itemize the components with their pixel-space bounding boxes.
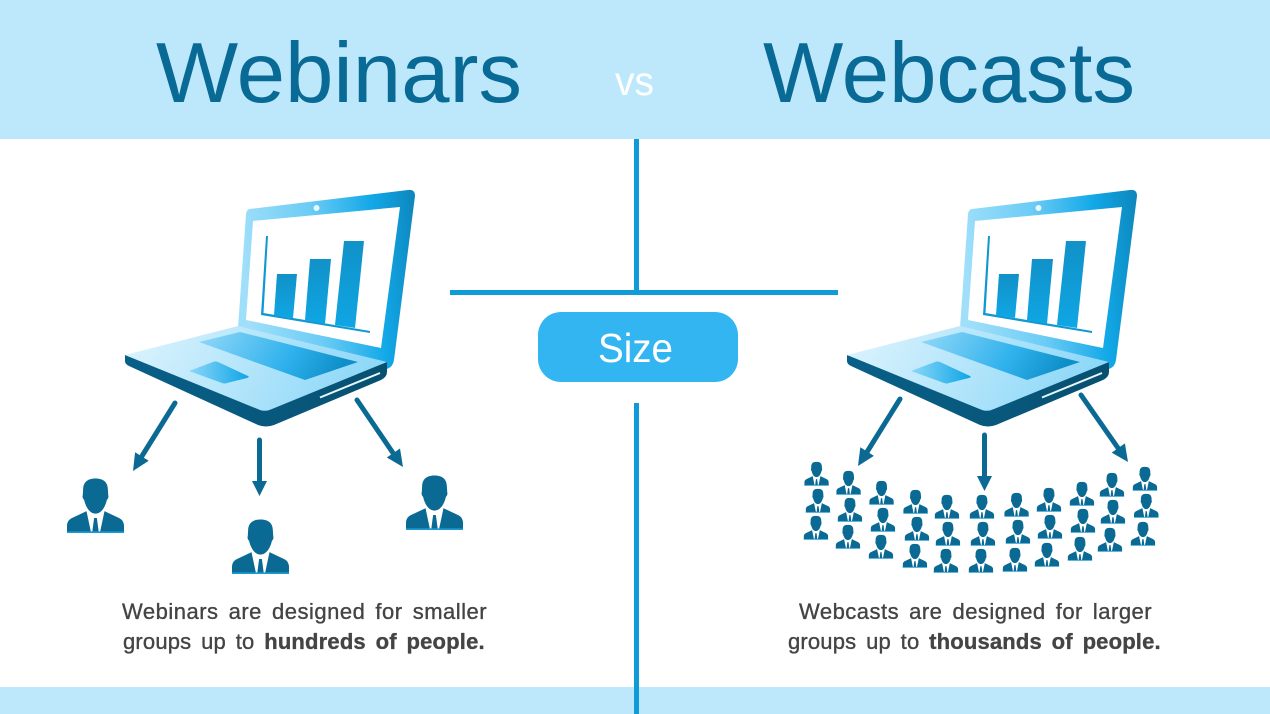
text: webcasts description — [788, 599, 1161, 654]
text: webinars description: groups up to hundreds of people. — [123, 629, 485, 654]
title: Webinars: Webinars — [156, 26, 522, 121]
icon: left laptop — [125, 190, 415, 426]
header band — [0, 0, 1270, 139]
text: webinars description: Webinars are designed for smaller — [122, 599, 487, 624]
text: webcasts description: Webcasts are designed for larger — [799, 599, 1152, 624]
icon: right laptop — [847, 190, 1137, 426]
icons: three attendees — [67, 476, 463, 574]
vs label: vs — [615, 58, 654, 104]
title: Webcasts: Webcasts — [763, 26, 1135, 121]
text: webinars description — [122, 599, 487, 654]
icons: crowd of attendees — [804, 462, 1158, 573]
footer band — [0, 687, 1270, 714]
arrows: webcast laptop to crowd — [858, 395, 1128, 491]
center divider — [450, 139, 838, 714]
text: webcasts description: groups up to thousands of people. — [788, 629, 1161, 654]
size badge — [538, 312, 738, 382]
arrows: webinar laptop to attendees — [133, 400, 403, 496]
size badge: Size — [598, 325, 673, 371]
